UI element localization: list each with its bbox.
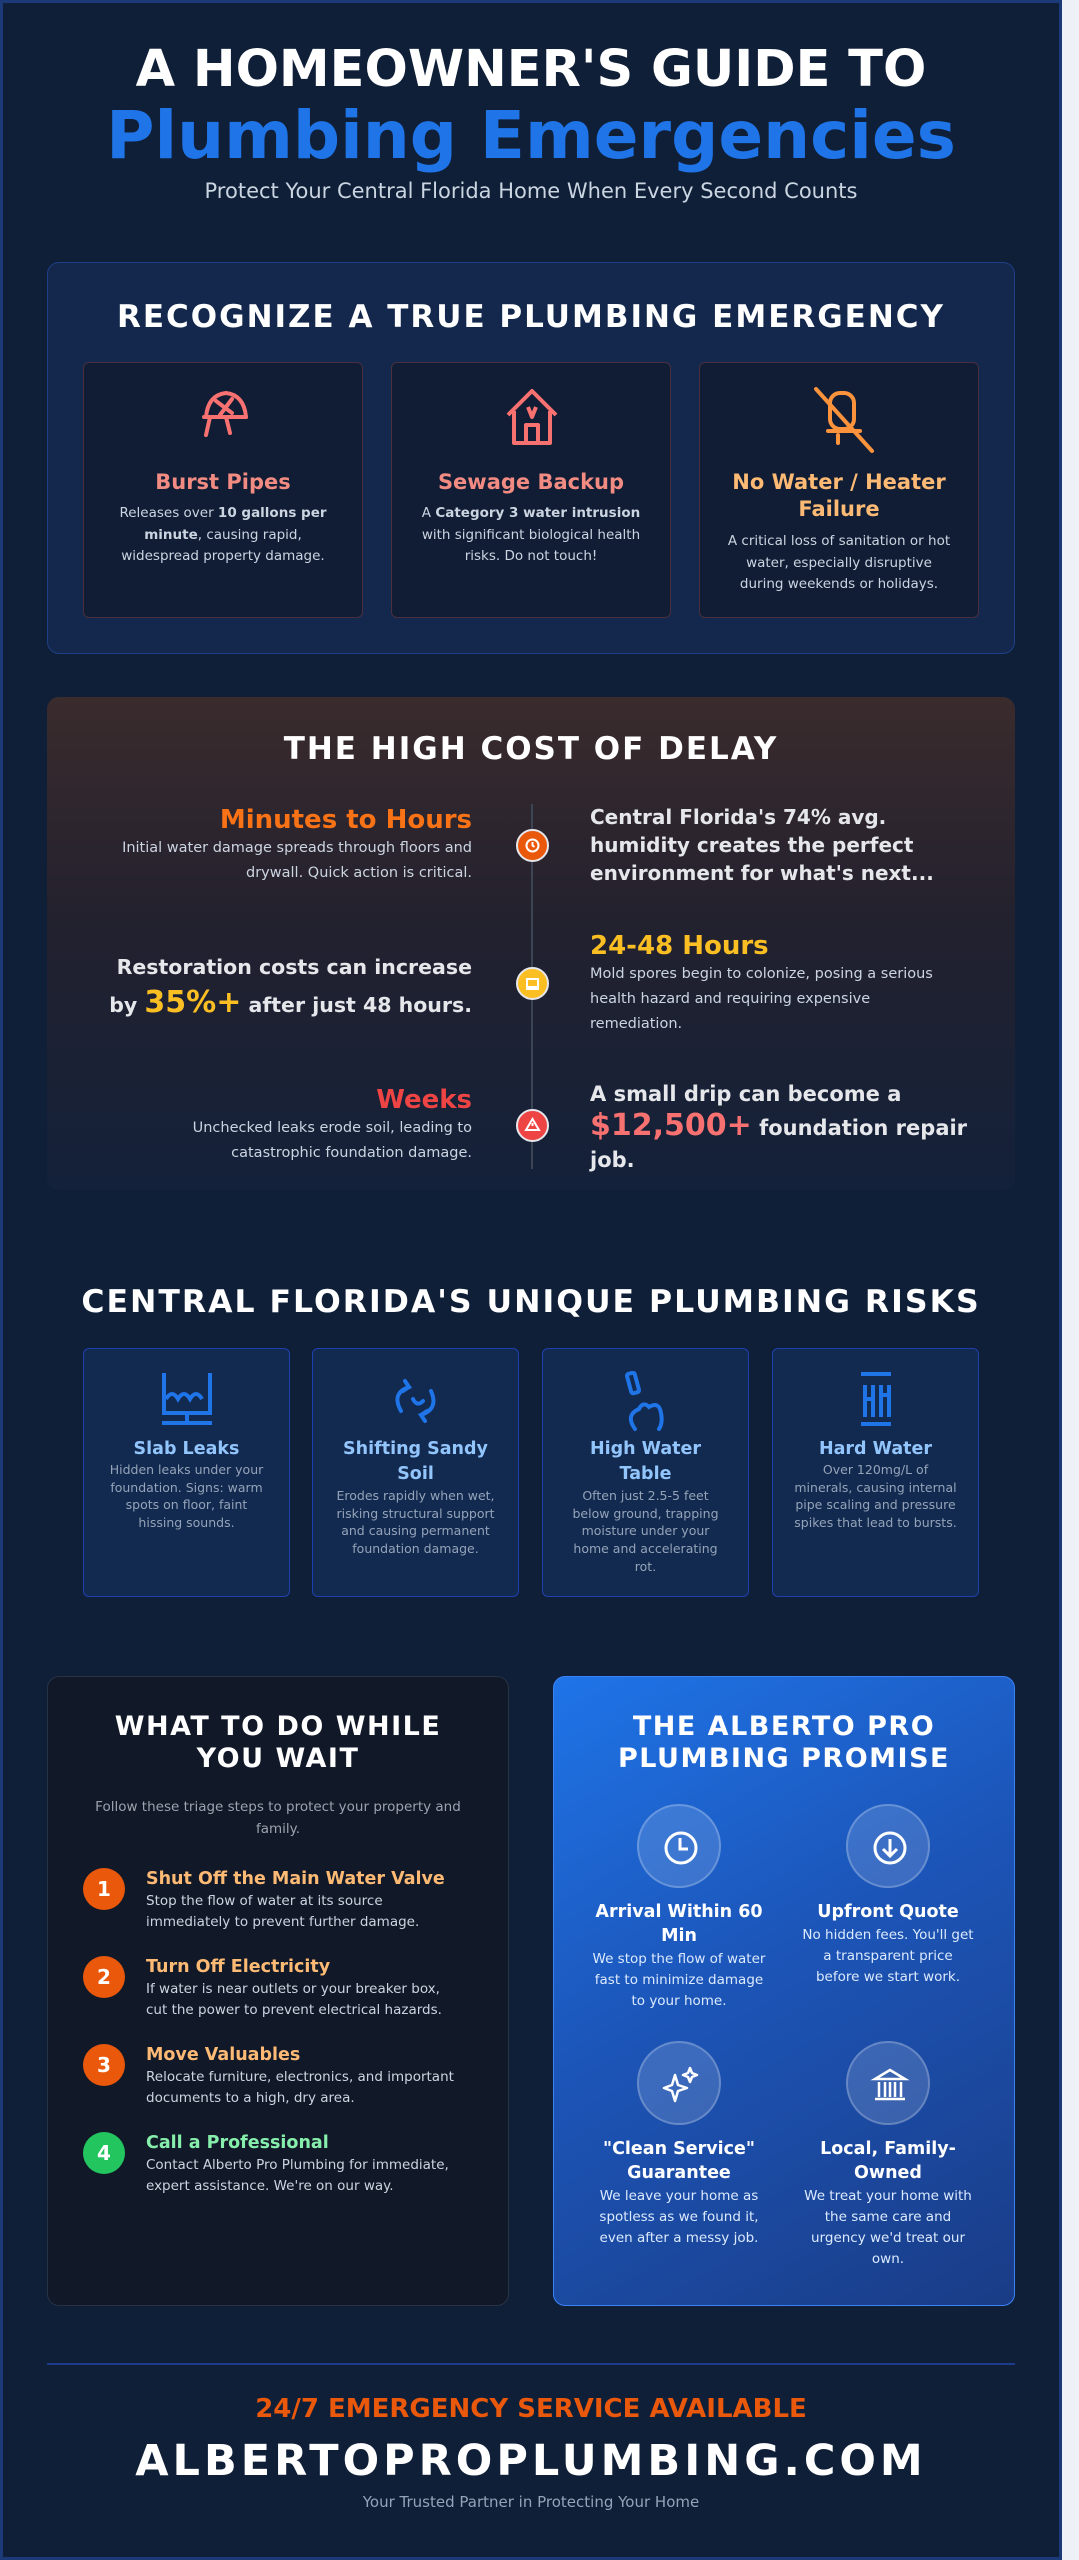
icon: heater crossed [814, 387, 874, 453]
card: hard water: Over 120mg/L of [823, 1462, 928, 1477]
card: sandy soil [312, 1348, 519, 1597]
card: sandy soil: and causing permanent [341, 1523, 490, 1538]
title: Plumbing Emergencies [106, 97, 956, 174]
promise: clean: even after a messy job. [600, 2230, 758, 2246]
card: hard water [772, 1348, 979, 1597]
card: sandy soil: foundation damage. [352, 1541, 479, 1556]
row1 right: environment for what's next... [590, 861, 934, 885]
card: no water: No Water / Heater [732, 470, 946, 494]
intro text: Follow these triage steps to protect your property and [95, 1799, 461, 1815]
heading: what to do [115, 1711, 441, 1774]
step 3 [83, 2044, 454, 2106]
step 4: 4 [97, 2141, 111, 2165]
row1 left: Initial water damage spreads through floors and [122, 840, 472, 856]
card: water table: moisture under your [582, 1523, 709, 1538]
card: slab leaks: hissing sounds. [138, 1515, 235, 1530]
row3 left: Unchecked leaks erode soil, leading to [193, 1120, 472, 1136]
card: hard water: pipe scaling and pressure [795, 1497, 956, 1512]
heading: promise [618, 1711, 950, 1774]
promise: quote: Upfront Quote [817, 1902, 959, 1922]
dot: mold [516, 967, 549, 1000]
step 2: If water is near outlets or your breaker box, [146, 1981, 440, 1997]
card: water table: below ground, trapping [572, 1506, 718, 1521]
card: burst pipes: minute, causing rapid, [144, 526, 302, 542]
step 4: Contact Alberto Pro Plumbing for immediate, [146, 2157, 449, 2173]
step 3: documents to a high, dry area. [146, 2090, 355, 2106]
promise: arrival: Min [661, 1926, 697, 1946]
step 1 [83, 1868, 445, 1930]
row3 right: job. [590, 1148, 635, 1172]
step 2 [83, 1956, 442, 2018]
promise: local: We treat your home with [804, 2188, 972, 2204]
row2 left: Restoration costs can increase [117, 955, 472, 979]
row2 right: Mold spores begin to colonize, posing a serious [590, 966, 933, 982]
card: no water: Failure [798, 497, 880, 521]
row2 right: 24-48 Hours [590, 931, 769, 961]
promise: quote [802, 1804, 974, 1985]
promise: quote: No hidden fees. You'll get [802, 1927, 974, 1943]
panel: recognize emergency [47, 262, 1015, 654]
promise: arrival [593, 1804, 766, 2009]
icon: clock [637, 1804, 721, 1888]
intro text: family. [256, 1821, 300, 1837]
panel: high cost of delay [47, 697, 1015, 1190]
promise: arrival: to your home. [631, 1993, 727, 2009]
card: sandy soil: Shifting Sandy [343, 1439, 488, 1459]
icon: slab [162, 1373, 212, 1425]
card: sewage: with significant biological health [422, 526, 640, 542]
step 4 [83, 2132, 449, 2194]
footer: tagline: Your Trusted Partner in Protecting Your Home [363, 2493, 699, 2511]
card: water table [542, 1348, 749, 1597]
promise: clean: spotless as we found it, [599, 2209, 759, 2225]
icon: hard water [861, 1372, 891, 1426]
step 2: Turn Off Electricity [146, 1957, 330, 1977]
card: hard water: spikes that lead to bursts. [794, 1515, 957, 1530]
timeline line [531, 804, 533, 1169]
footer: emergency service: 24/7 EMERGENCY SERVICE AVAILABLE [255, 2394, 807, 2424]
step 4: Call a Professional [146, 2133, 329, 2153]
icon: house [506, 388, 558, 445]
row3 left: catastrophic foundation damage. [231, 1145, 472, 1161]
promise: clean: "Clean Service" [603, 2139, 755, 2159]
promise: clean: Guarantee [627, 2163, 731, 2183]
row2 right: health hazard and requiring expensive [590, 991, 870, 1007]
row1 right [590, 805, 934, 885]
card: sandy soil: Erodes rapidly when wet, [336, 1488, 495, 1503]
promise: local: Owned [854, 2163, 922, 2183]
card: slab leaks: Slab Leaks [134, 1439, 239, 1459]
row1 right: Central Florida's 74% avg. [590, 805, 886, 829]
promise: arrival: fast to minimize damage [595, 1972, 763, 1988]
row2 left [109, 955, 472, 1020]
promise: clean [599, 2041, 759, 2246]
dot: warning [516, 1109, 549, 1142]
promise: arrival: We stop the flow of water [593, 1951, 765, 1967]
card: sewage: A Category 3 water intrusion [422, 505, 640, 521]
card: water table: home and accelerating [573, 1541, 718, 1556]
card: no water: A critical loss of sanitation or hot [728, 533, 950, 549]
promise: local: the same care and [825, 2209, 951, 2225]
icon: sparkle [637, 2041, 721, 2125]
heading: what to do: WHAT TO DO WHILE [115, 1711, 441, 1742]
card: slab leaks: spots on floor, faint [126, 1497, 247, 1512]
promise: local [804, 2041, 972, 2267]
card: sandy soil: risking structural support [336, 1506, 495, 1521]
panel: what to do [47, 1676, 509, 2306]
promise: arrival: Arrival Within 60 [595, 1902, 763, 1922]
promise: local: own. [872, 2251, 904, 2267]
heading: recognize: RECOGNIZE A TRUE PLUMBING EMERGENCY [117, 299, 945, 335]
icon: shifting [395, 1378, 436, 1424]
card: sewage [391, 362, 671, 618]
card: burst pipes: widespread property damage. [121, 548, 325, 564]
step 1: immediately to prevent further damage. [146, 1914, 419, 1930]
subtitle: Protect Your Central Florida Home When Every Second Counts [205, 179, 857, 203]
heading: florida risks: CENTRAL FLORIDA'S UNIQUE PLUMBING RISKS [81, 1284, 981, 1320]
panel: promise [553, 1676, 1015, 2306]
row3 right: A small drip can become a [590, 1082, 901, 1106]
row1 left: Minutes to Hours [220, 805, 472, 835]
promise: local: urgency we'd treat our [811, 2230, 965, 2246]
promise: clean: We leave your home as [600, 2188, 758, 2204]
card: burst pipes [83, 362, 363, 618]
card: no water: during weekends or holidays. [740, 576, 938, 592]
dot: clock [516, 829, 549, 862]
row2 right: remediation. [590, 1016, 682, 1032]
step 3: 3 [97, 2053, 111, 2077]
card: slab leaks: foundation. Signs: warm [110, 1480, 263, 1495]
row3 right: $12,500+ foundation repair [590, 1108, 967, 1143]
row3 right [589, 1082, 967, 1172]
row2 right [590, 931, 933, 1032]
footer: website: ALBERTOPROPLUMBING.COM [135, 2436, 927, 2486]
title: A HOMEOWNER'S GUIDE TO [136, 40, 926, 99]
card: water table: Often just 2.5-5 feet [582, 1488, 709, 1503]
heading: what to do: YOU WAIT [197, 1743, 359, 1774]
card: water table: rot. [635, 1559, 656, 1574]
title [106, 40, 956, 174]
row2 left: by 35%+ after just 48 hours. [109, 985, 472, 1020]
divider [47, 2363, 1015, 2365]
card: water table: High Water [590, 1439, 701, 1459]
row3 left [193, 1085, 472, 1161]
promise: local: Local, Family- [820, 2139, 956, 2159]
row1 left [122, 805, 472, 881]
step 1: Stop the flow of water at its source [146, 1893, 383, 1909]
row3 left: Weeks [376, 1085, 472, 1115]
row1 right: humidity creates the perfect [590, 833, 913, 857]
card: sewage: risks. Do not touch! [465, 548, 597, 564]
step 3: Move Valuables [146, 2045, 300, 2065]
card: no water [699, 362, 979, 618]
intro text [95, 1799, 461, 1837]
step 4: expert assistance. We're on our way. [146, 2178, 393, 2194]
heading: promise: PLUMBING PROMISE [618, 1743, 950, 1774]
card: slab leaks [83, 1348, 290, 1597]
icon: arrow down circle [846, 1804, 930, 1888]
row1 left: drywall. Quick action is critical. [246, 865, 472, 881]
promise: quote: a transparent price [823, 1948, 953, 1964]
card: sandy soil: Soil [397, 1464, 434, 1484]
icon: burst pipe [202, 391, 248, 437]
card: burst pipes: Burst Pipes [155, 470, 291, 494]
heading: delay: THE HIGH COST OF DELAY [284, 731, 778, 767]
step 1: Shut Off the Main Water Valve [146, 1869, 445, 1889]
card: burst pipes: Releases over 10 gallons per [119, 505, 327, 521]
card: slab leaks: Hidden leaks under your [110, 1462, 263, 1477]
promise: quote: before we start work. [816, 1969, 960, 1985]
icon: water table [625, 1371, 664, 1432]
card: sewage: Sewage Backup [438, 470, 624, 494]
heading: promise: THE ALBERTO PRO [633, 1711, 935, 1742]
step 2: 2 [97, 1965, 111, 1989]
card: no water: water, especially disruptive [746, 554, 932, 570]
card: hard water: minerals, causing internal [794, 1480, 957, 1495]
step 2: cut the power to prevent electrical hazards. [146, 2002, 442, 2018]
card: water table: Table [620, 1464, 671, 1484]
icon: building [846, 2041, 930, 2125]
step 3: Relocate furniture, electronics, and important [146, 2069, 454, 2085]
step 1: 1 [97, 1877, 111, 1901]
card: hard water: Hard Water [819, 1439, 932, 1459]
